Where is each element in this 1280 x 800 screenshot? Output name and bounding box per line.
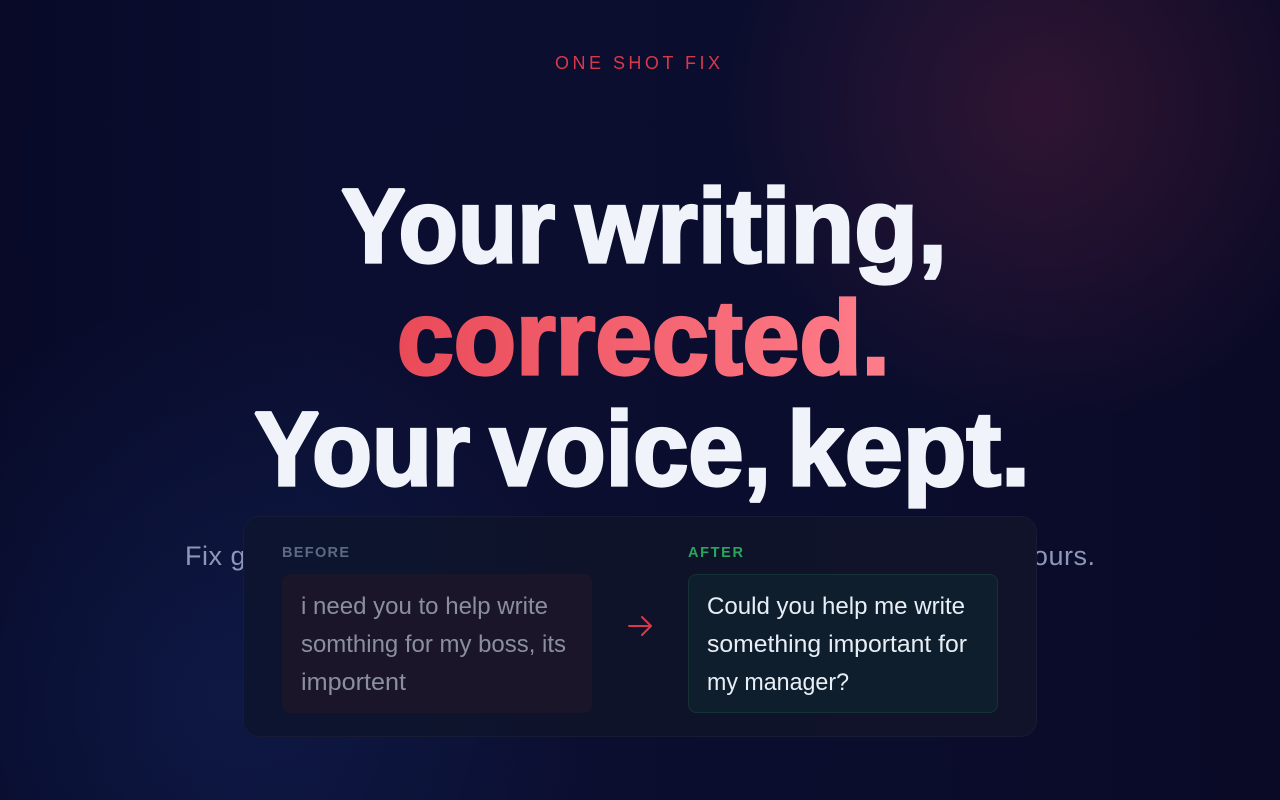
before text box: somthing for my boss, its bbox=[301, 631, 566, 658]
after text box: Could you help me write bbox=[707, 593, 965, 620]
headline line 3: kept. bbox=[787, 391, 1030, 508]
after text box: my manager? bbox=[707, 669, 849, 696]
arrow icon bbox=[629, 617, 651, 635]
after text box bbox=[688, 574, 998, 712]
before text box bbox=[282, 574, 592, 713]
comparison card bbox=[244, 516, 1036, 736]
after label: AFTER bbox=[688, 545, 744, 561]
headline bbox=[254, 168, 1030, 508]
headline line 3: Your bbox=[254, 391, 470, 508]
after text box: something important for bbox=[707, 631, 967, 658]
headline line 3 bbox=[254, 391, 1030, 508]
headline line 1: Your bbox=[341, 168, 555, 285]
headline line 1 bbox=[341, 168, 947, 285]
before text box: i need you to help write bbox=[301, 593, 548, 620]
headline line 2: accent: corrected. bbox=[397, 280, 890, 397]
eyebrow label: ONE SHOT FIX bbox=[555, 53, 720, 73]
subtitle, partly covered by the card: Fix grammar, spelling, clarity and tone in one shot. The words stay yours. bbox=[185, 541, 1095, 571]
headline line 3: voice, bbox=[490, 391, 771, 508]
before label: BEFORE bbox=[282, 545, 349, 561]
headline line 1: writing, bbox=[575, 168, 947, 285]
before text box: importent bbox=[301, 669, 406, 696]
